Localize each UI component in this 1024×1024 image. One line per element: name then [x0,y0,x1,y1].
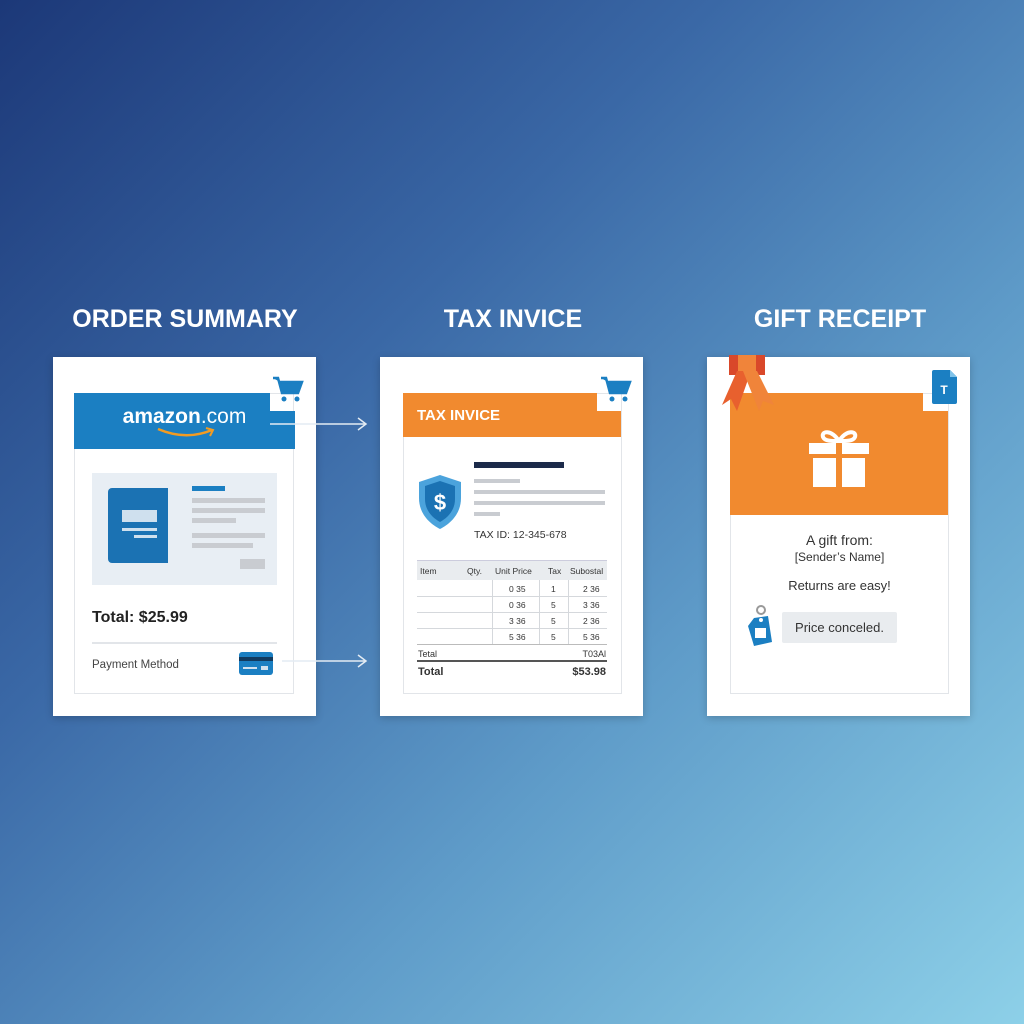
product box [92,473,277,585]
table: 2 36 [583,584,600,594]
table: 5 36 [509,632,526,642]
panel: tax invoice [380,357,643,716]
text: gift from: A gift from: [806,532,873,548]
table: T03Al [582,649,606,659]
header: amazon [74,393,295,449]
icon: shield [419,475,461,529]
header: tax invice: TAX INVICE [417,407,500,424]
payment method: Payment Method [92,659,179,671]
icon: document [932,370,957,404]
text: gift from: Returns are easy! [788,578,891,593]
title: order summary: ORDER SUMMARY [72,305,298,333]
title: tax invoice: TAX INVICE [444,305,582,333]
table: Tax [548,566,561,576]
total: Total: $25.99 [92,609,188,626]
panel: order summary [53,357,316,716]
text lines [474,462,564,468]
title: gift receipt: GIFT RECEIPT [754,305,926,333]
table: Tetal [418,649,437,659]
table: 5 36 [583,632,600,642]
tax id: TAX ID: 12-345-678 [474,529,567,541]
table: 5 [551,600,556,610]
text: gift from: [Sender’s Name] [795,550,884,564]
price concealed box [782,612,897,643]
header: gift [730,393,948,515]
table: 5 [551,616,556,626]
table: 5 [551,632,556,642]
table: Qty. [467,566,482,576]
icon: document: T [940,383,948,397]
icon: book [108,488,168,563]
table: Item [420,566,437,576]
icon: ribbon [722,355,774,411]
icon: cart [273,376,304,402]
table: Subostal [570,566,603,576]
icon: gift [809,430,869,487]
table: $53.98 [572,666,606,678]
arrow: payment to tax invoice [282,655,366,667]
text: gift from [788,532,891,593]
table: Total [418,666,443,678]
table: 3 36 [509,616,526,626]
table: 3 36 [583,600,600,610]
header: amazon: amazon.com [123,405,246,428]
icon: price tag [748,605,772,646]
price concealed box: Price conceled. [795,620,884,635]
table: 1 [551,584,556,594]
table: Unit Price [495,566,532,576]
icon: shield: $ [434,490,446,515]
icon: credit card [239,652,273,675]
arrow: header to tax invoice [270,418,366,430]
panel: gift receipt [707,357,970,716]
icon: cart [601,376,632,402]
table [417,560,607,678]
table: 2 36 [583,616,600,626]
table: 0 35 [509,584,526,594]
table: 0 36 [509,600,526,610]
header: tax invice [403,393,621,437]
